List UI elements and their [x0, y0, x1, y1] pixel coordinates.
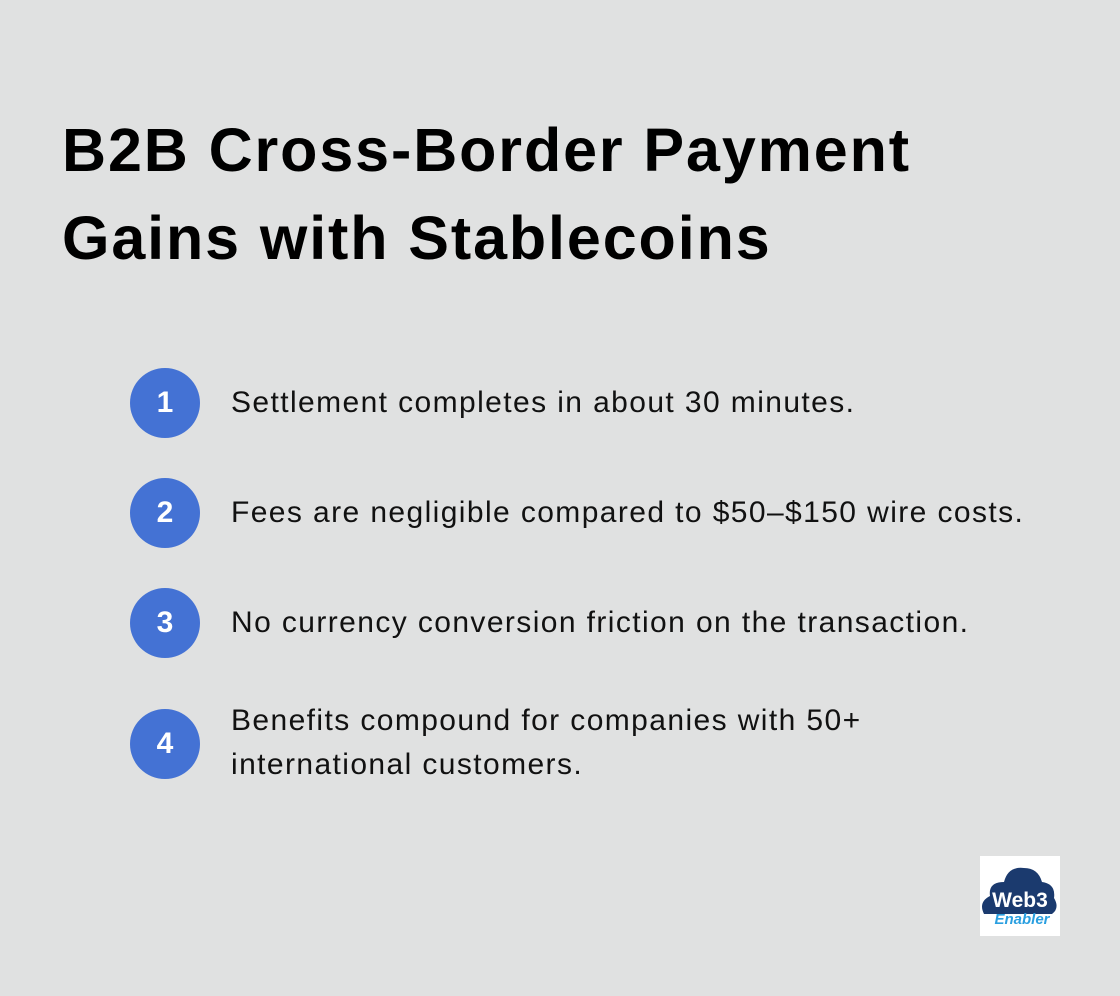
text 1: Settlement completes in about 30 minutes.: [231, 386, 855, 419]
title: [62, 116, 911, 272]
badge 2: [130, 478, 200, 548]
title: Gains with Stablecoins: [62, 204, 772, 272]
text 4: [231, 704, 862, 781]
badge 1: [130, 368, 200, 438]
logo: Web3: [992, 889, 1048, 912]
item 2: [130, 478, 1024, 548]
badge 3: [130, 588, 200, 658]
badge 4: [130, 709, 200, 779]
badge 1: 1: [157, 386, 173, 419]
logo: [980, 856, 1060, 936]
item 1: [130, 368, 855, 438]
text 2: Fees are negligible compared to $50–$150 wire costs.: [231, 496, 1024, 529]
text 4: international customers.: [231, 748, 583, 781]
badge 3: 3: [157, 606, 173, 639]
logo: Enabler: [994, 911, 1051, 928]
badge 4: 4: [157, 727, 173, 760]
item 4: [130, 704, 862, 781]
title: B2B Cross-Border Payment: [62, 116, 911, 184]
text 3: No currency conversion friction on the transaction.: [231, 606, 969, 639]
badge 2: 2: [157, 496, 173, 529]
text 4: Benefits compound for companies with 50+: [231, 704, 862, 737]
item 3: [130, 588, 969, 658]
